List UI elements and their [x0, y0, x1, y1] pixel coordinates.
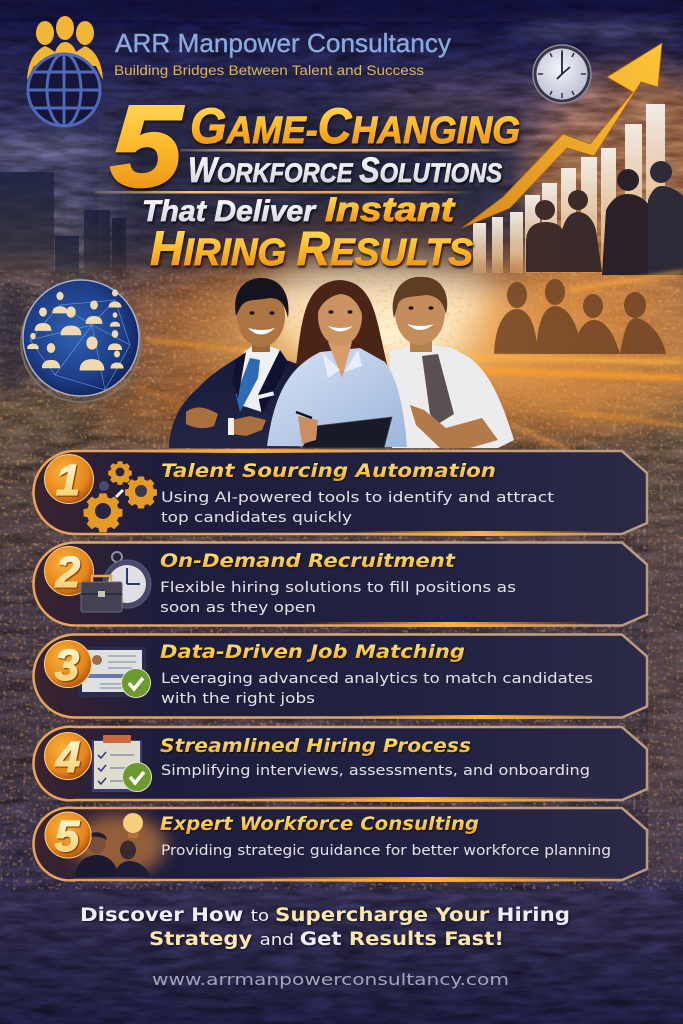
badge 1 — [44, 454, 94, 505]
title word: instant: Instant — [325, 191, 456, 229]
description: Using AI-powered tools to identify and attract — [161, 490, 554, 506]
badge 3 — [44, 640, 92, 690]
description: top candidates quickly — [161, 510, 352, 526]
panel 2: on-demand recruitment — [34, 542, 647, 627]
icon: consultants and light bulb — [74, 813, 166, 877]
city skyline on the left — [0, 172, 126, 280]
dark backing behind title — [110, 104, 520, 268]
icon: stopwatch and briefcase — [81, 552, 151, 612]
rising gold arrow — [462, 43, 662, 228]
description: with the right jobs — [161, 691, 315, 707]
heading: On-Demand Recruitment — [160, 550, 456, 572]
description: Flexible hiring solutions to fill positions as — [160, 580, 516, 596]
heading: Talent Sourcing Automation — [161, 460, 496, 482]
network globe — [0, 280, 141, 402]
orange light streaks — [135, 272, 683, 450]
description: Leveraging advanced analytics to match candidates — [161, 671, 593, 687]
heading: Data-Driven Job Matching — [160, 641, 465, 663]
decorative rule 1 — [180, 149, 520, 152]
website url: www.arrmanpowerconsultancy.com — [152, 970, 509, 989]
badge 1: 1 — [56, 456, 80, 505]
clock icon — [533, 45, 591, 103]
rising bar chart — [473, 104, 665, 273]
title line: that deliver: That Deliver — [142, 195, 317, 228]
title line: workforce solutions: WORKFORCE SOLUTIONS — [188, 151, 502, 190]
badge 4: 4 — [55, 733, 80, 782]
icon: candidate profile screen — [78, 647, 150, 698]
clipboard — [302, 417, 392, 448]
panel 3: data-driven job matching — [34, 634, 647, 719]
person: man in white shirt — [389, 277, 514, 448]
title line: game-changing: GAME-CHANGING — [190, 98, 520, 154]
icon: gears — [84, 461, 157, 532]
closing call to action — [80, 905, 570, 950]
title line: hiring results: HIRING RESULTS — [150, 223, 473, 276]
title — [95, 81, 520, 276]
panel 5: expert workforce consulting — [33, 808, 647, 882]
badge 2 — [44, 546, 94, 597]
badge 4 — [44, 732, 92, 782]
logo: three people — [27, 16, 103, 80]
description: Providing strategic guidance for better workforce planning — [161, 843, 611, 859]
cta line 1: Discover How to Supercharge Your Hiring — [80, 905, 570, 926]
icon: checklist clipboard — [92, 735, 152, 792]
tagline: Building Bridges Between Talent and Success — [114, 62, 424, 78]
heading: Streamlined Hiring Process — [160, 735, 471, 757]
panel 4: streamlined hiring process — [33, 727, 647, 802]
decorative rule 2 — [95, 191, 475, 194]
business silhouettes behind chart — [526, 161, 683, 275]
decorative big 5: 5 — [110, 81, 184, 211]
badge 5: 5 — [55, 812, 80, 861]
cta line 2: Strategy and Get Results Fast! — [149, 929, 504, 950]
description: Simplifying interviews, assessments, and onboarding — [161, 763, 590, 779]
person: woman with clipboard — [267, 280, 407, 448]
person: man in navy suit — [169, 278, 300, 448]
lower silhouettes on the right — [494, 279, 666, 354]
company name: ARR Manpower Consultancy — [115, 28, 451, 58]
company logo — [27, 16, 103, 126]
heading: Expert Workforce Consulting — [160, 813, 479, 835]
panel 1: talent sourcing automation — [34, 449, 647, 536]
badge 2: 2 — [55, 548, 81, 597]
description: soon as they open — [160, 600, 316, 616]
logo: globe — [28, 54, 100, 126]
three smiling professionals — [169, 277, 514, 448]
badge 5 — [45, 812, 91, 861]
badge 3: 3 — [55, 641, 79, 690]
